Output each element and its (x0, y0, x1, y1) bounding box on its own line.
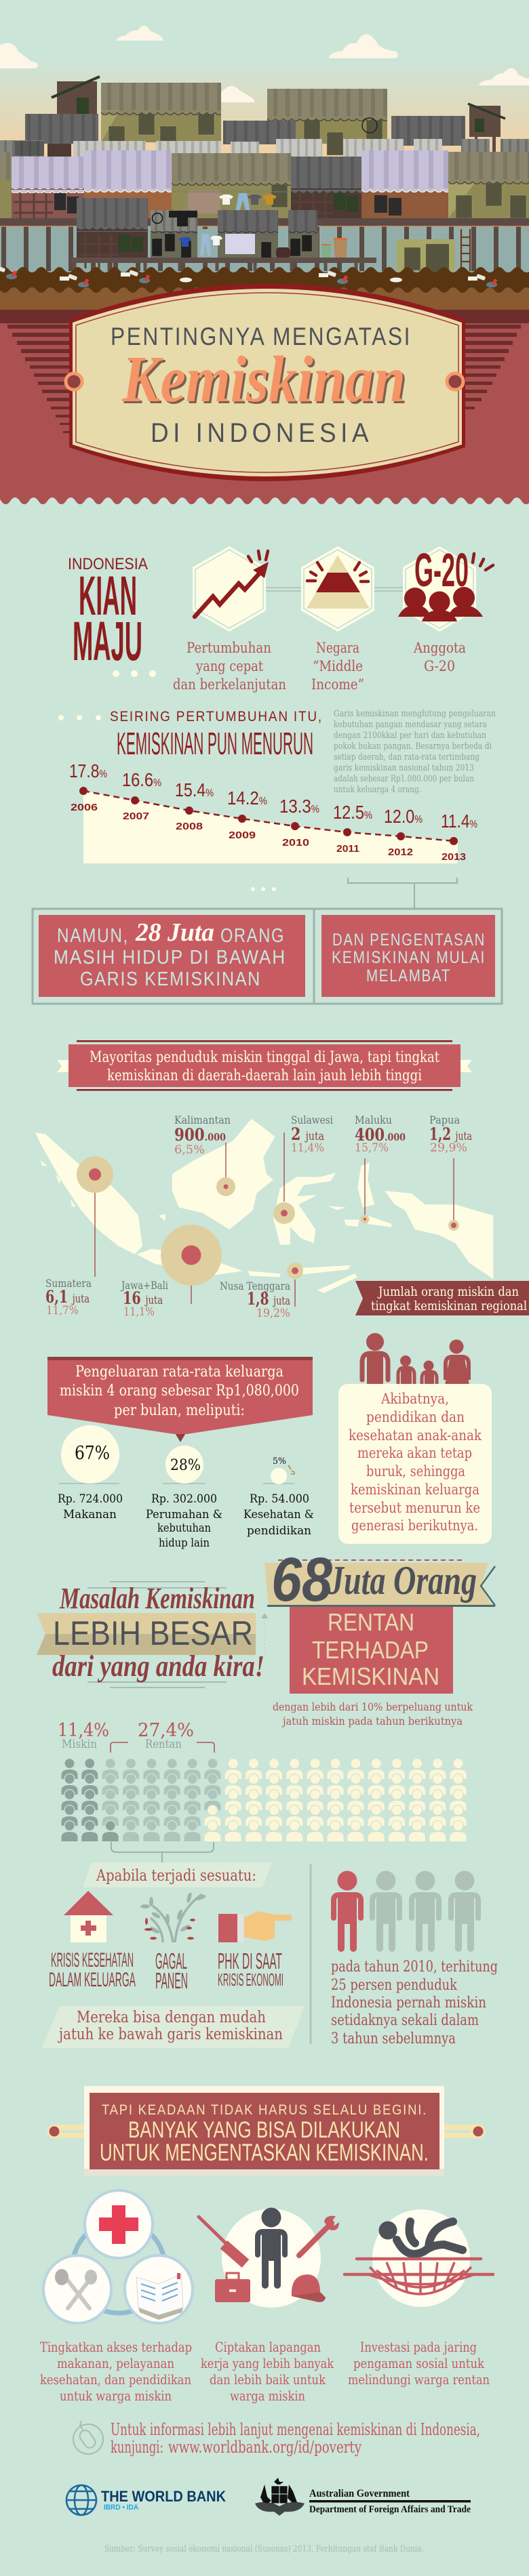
chart years (71, 802, 466, 863)
chart values: 15.4% (175, 779, 214, 800)
ribbon: mudah jatuh miskin: jatuh ke bawah garis kemiskinan (57, 2026, 283, 2043)
ribbon: apabila terjadi sesuatu: Apabila terjadi sesuatu: (96, 1867, 256, 1885)
map labels: Kalimantan (174, 1113, 231, 1126)
panel: much can be done (48, 2086, 484, 2176)
chart values: 12.5% (333, 802, 372, 823)
expenditure labels: Kesehatan & (243, 1508, 314, 1521)
expenditure circles: 28% (170, 1457, 201, 1474)
divider (309, 1864, 312, 2044)
chart years: 2010 (282, 837, 309, 849)
callout: consequences for children: kemiskinan keluarga (351, 1481, 479, 1498)
hexagon captions: Anggota (413, 640, 466, 656)
map labels: 6,1 juta (45, 1287, 90, 1307)
connector from chart to boxes (348, 878, 457, 909)
icon: family (362, 1333, 469, 1385)
people pictogram: 100 persons (61, 1758, 467, 1862)
ribbon: mudah jatuh miskin (41, 2006, 305, 2048)
heading: poverty decline (58, 709, 323, 761)
expenditure circles: 67% (75, 1443, 110, 1464)
map labels: Sumatera (45, 1277, 92, 1290)
expenditure labels (58, 1492, 314, 1550)
map labels: 400.000 (355, 1125, 406, 1145)
poverty line definition: untuk keluarga 4 orang. (334, 785, 421, 795)
icon: health house (64, 1891, 113, 1942)
expenditure banner: miskin 4 orang sebesar Rp1,080,000 (60, 1383, 299, 1399)
hexagon captions: Negara (316, 640, 359, 656)
crisis labels: DALAM KELUARGA (49, 1969, 136, 1991)
logo: Australian Government: Australian Government (309, 2488, 410, 2499)
ribbon: apabila terjadi sesuatu (83, 1862, 272, 1887)
callout text: 28 juta: MASIH HIDUP DI BAWAH (54, 947, 286, 968)
map labels: Maluku (355, 1113, 392, 1126)
map labels: 900.000 (174, 1125, 226, 1145)
hexagon captions (173, 640, 466, 693)
text: KRISIS EKONOMI (218, 1969, 283, 1990)
chart values: 11.4% (441, 811, 477, 832)
poverty line definition: dengan 2100kkal per hari dan kebutuhan (334, 731, 487, 741)
text: 25 percent: 3 tahun sebelumnya (331, 2030, 456, 2047)
chart values: 14.2% (227, 788, 267, 809)
callout text: 28 juta: 28 Juta (135, 918, 214, 947)
hexagon captions: Pertumbuhan (187, 640, 271, 656)
panel: 28 juta / slowing reduction (33, 909, 502, 1004)
recommendation 2: warga miskin (230, 2388, 305, 2404)
recommendation 1: Tingkatkan akses terhadap (40, 2339, 192, 2355)
vulnerable caption: dengan lebih dari 10% berpeluang untuk (273, 1700, 473, 1713)
map of Indonesia (35, 1119, 493, 1293)
callout text: slowing: MELAMBAT (366, 966, 451, 985)
expenditure circles: 5% (273, 1456, 286, 1467)
connectors between hexagons (263, 588, 408, 591)
poverty line definition: kebutuhan pangan mendasar yang setara (334, 720, 487, 730)
expenditure banner: Pengeluaran rata-rata keluarga (75, 1364, 283, 1381)
heading: masalah lebih besar: Masalah Kemiskinan (59, 1582, 255, 1615)
recommendation 3: Investasi pada jaring (360, 2339, 477, 2355)
callout: consequences for children: buruk, sehingga (366, 1463, 465, 1479)
callout text: 28 juta (54, 918, 286, 990)
chart years: 2006 (71, 802, 98, 813)
people chart stats: 11,4% (58, 1720, 109, 1741)
recommendation 3 (348, 2339, 490, 2388)
callout text: slowing (332, 931, 486, 985)
icon: pointing hand layoff (218, 1911, 292, 1942)
heading: poverty decline: SEIRING PERTUMBUHAN ITU, (110, 709, 323, 724)
callout text: slowing: KEMISKINAN MULAI (332, 948, 486, 967)
heading: masalah lebih besar: LEBIH BESAR (53, 1614, 253, 1652)
chart years: 2013 (442, 851, 466, 863)
map labels: 6,5% (174, 1143, 205, 1157)
map labels: 2 juta (291, 1124, 324, 1144)
hexagon captions: Income” (311, 676, 364, 693)
expenditure circles (59, 1425, 295, 1484)
logo: World Bank (66, 2485, 226, 2515)
logo: Australian Government: Department of Foreign Affairs and Trade (309, 2504, 471, 2515)
text: 25 percent: setidaknya sekali dalam (331, 2012, 479, 2029)
heading: masalah lebih besar (37, 1582, 268, 1688)
map bubbles and leaders (77, 1132, 459, 1307)
text: 25 percent: 25 persen penduduk (331, 1977, 458, 1994)
banner: regional poverty: kemiskinan di daerah-daerah lain jauh lebih tinggi (107, 1067, 422, 1084)
banner: regional poverty: Mayoritas penduduk miskin tinggal di Jawa, tapi tingkat (90, 1049, 439, 1066)
more information (111, 2420, 480, 2457)
clouds (0, 26, 529, 102)
panel: rentan terhadap kemiskinan: KEMISKINAN (302, 1662, 439, 1690)
back row houses (25, 77, 505, 156)
recommendation 2: dan lebih baik untuk (210, 2371, 326, 2388)
people chart stats: 27,4% (138, 1720, 194, 1741)
ribbon: mudah jatuh miskin: Mereka bisa dengan mudah (77, 2009, 266, 2026)
icon: G-20 hexagon (398, 544, 493, 632)
map labels: 16 juta (123, 1288, 163, 1308)
map labels: 19,2% (256, 1307, 290, 1320)
expenditure banner: per bulan, meliputi: (114, 1402, 245, 1419)
scroll rollers (48, 2125, 484, 2138)
poverty line definition: adalah sebesar Rp1.080.000 per bulan (334, 774, 475, 784)
poverty line definition: pokok bukan pangan. Besarnya berbeda di (334, 741, 492, 752)
icon: safety net (345, 2209, 493, 2307)
logo: World Bank: IBRD • IDA (104, 2503, 138, 2512)
icon: failed crops (140, 1892, 207, 1942)
title text (111, 323, 412, 448)
map labels: 11,7% (46, 1304, 79, 1317)
text: 25 percent: Indonesia pernah miskin (331, 1995, 486, 2011)
callout text: 28 juta: GARIS KEMISKINAN (80, 968, 261, 990)
callout: consequences for children (338, 1384, 492, 1544)
callout text: 28 juta: NAMUN, (57, 925, 129, 947)
expenditure labels: pendidikan (247, 1524, 311, 1538)
map legend tag (355, 1281, 529, 1315)
panel: rentan terhadap kemiskinan: TERHADAP (312, 1636, 429, 1664)
icon: computer mouse (73, 2421, 103, 2454)
map labels: Jawa+Bali (120, 1279, 168, 1292)
chart values: 16.6% (122, 769, 161, 790)
title text: PENTINGNYA MENGATASI (111, 323, 412, 350)
poverty line definition: Garis kemiskinan menghitung pengeluaran (334, 709, 496, 719)
callout: consequences for children: Akibatnya, (380, 1391, 449, 1407)
recommendation 1: kesehatan, dan pendidikan (40, 2371, 191, 2388)
map labels (45, 1113, 472, 1320)
expenditure labels: Rp. 54.000 (250, 1492, 309, 1506)
panel: much can be done: BANYAK YANG BISA DILAKUKAN (128, 2117, 400, 2143)
heading: Indonesia kian maju: KIAN (79, 565, 137, 627)
expenditure labels: Makanan (63, 1508, 117, 1521)
recommendation 2: Ciptakan lapangan (215, 2339, 321, 2355)
recommendation 1 (40, 2339, 192, 2404)
hexagon captions: yang cepat (195, 658, 263, 674)
map labels: Sulawesi (291, 1113, 333, 1126)
expenditure labels: Rp. 724.000 (58, 1492, 123, 1506)
chart years: 2007 (123, 811, 149, 822)
title text: Kemiskinan (123, 345, 408, 418)
icon: pyramid hexagon (301, 546, 374, 632)
expenditure labels: hidup lain (159, 1536, 210, 1550)
front row huts on platform (71, 198, 376, 271)
recommendation 1: untuk warga miskin (60, 2388, 172, 2404)
heading: Indonesia kian maju: INDONESIA (68, 555, 148, 573)
recommendation 1: makanan, pelayanan (57, 2355, 174, 2371)
hexagon captions: dan berkelanjutan (173, 676, 286, 693)
logo: Australian Government (255, 2478, 471, 2516)
heading: 68 juta orang ribbon: 68 (271, 1545, 333, 1614)
chart values (69, 760, 477, 832)
callout: consequences for children: kesehatan anak-anak (349, 1427, 482, 1444)
title panel background (0, 310, 529, 504)
line chart: poverty rate 2006-2013 (69, 760, 477, 863)
callout: consequences for children: generasi berikutnya. (351, 1517, 478, 1534)
map labels: 1,2 juta (429, 1124, 472, 1144)
mud bank with rubbish (0, 266, 529, 310)
small dots (251, 887, 276, 891)
expenditure banner (47, 1357, 313, 1442)
recommendations text (40, 2339, 490, 2404)
chart years: 2012 (388, 846, 413, 858)
crisis labels: PANEN (155, 1968, 188, 1993)
chart values: 12.0% (384, 806, 423, 827)
panel: much can be done: TAPI KEADAAN TIDAK HARUS SELALU BEGINI. (102, 2102, 427, 2118)
expenditure labels: Perumahan & (146, 1508, 222, 1521)
middle row houses (0, 150, 529, 226)
text: 25 percent (331, 1959, 498, 2047)
chart years: 2011 (336, 843, 359, 855)
map labels: Papua (429, 1113, 460, 1126)
title text: Kemiskinan (121, 343, 406, 416)
heading: 68 juta orang ribbon: Juta Orang (328, 1558, 477, 1603)
expenditure labels: kebutuhan (157, 1521, 211, 1535)
banner: regional poverty (57, 1040, 472, 1091)
callout: consequences for children: tersebut menurun ke (349, 1500, 480, 1516)
recommendation 2: kerja yang lebih banyak (201, 2355, 334, 2371)
heading: Indonesia kian maju: MAJU (73, 611, 142, 672)
expenditure labels: Rp. 302.000 (151, 1492, 217, 1506)
heading: Indonesia kian maju (68, 555, 156, 677)
vulnerable caption: jatuh miskin pada tahun berikutnya (281, 1715, 463, 1727)
callout: consequences for children: pendidikan dan (366, 1409, 465, 1425)
deck, water and posts (0, 218, 529, 272)
source note: Sumber: Survey sosial ekonomi nasional (Susenas) 2013. Perhitungan staf Bank Dunia. (104, 2544, 424, 2554)
laundry line (173, 192, 288, 212)
map labels: 11,4% (291, 1141, 324, 1155)
map labels: 15,7% (355, 1141, 389, 1155)
poverty line definition: setiap daerah, dan rata-rata tertimbang (334, 752, 479, 762)
chart values: 13.3% (279, 796, 319, 817)
people chart stats: Rentan (145, 1738, 182, 1751)
logo: World Bank: THE WORLD BANK (101, 2488, 226, 2505)
heading: masalah lebih besar: dari yang anda kira! (52, 1650, 264, 1683)
map labels: 11,1% (123, 1305, 155, 1319)
crisis labels: GAGAL (155, 1948, 187, 1974)
map labels: 1,8 juta (247, 1289, 290, 1309)
recommendation 3: pengaman sosial untuk (353, 2355, 485, 2371)
recommendation 3: melindungi warga rentan (348, 2371, 490, 2388)
icon: food, health, education circles (43, 2190, 193, 2323)
hexagon captions: “Middle (313, 658, 363, 674)
badge rivets (66, 373, 463, 390)
callout: consequences for children: mereka akan tetap (357, 1445, 472, 1461)
poverty line definition: garis kemiskinan nasional tahun 2013 (334, 763, 474, 773)
title badge (66, 283, 465, 481)
callout text: 28 juta: ORANG (220, 925, 285, 947)
vulnerable caption (273, 1700, 473, 1727)
title text: DI INDONESIA (151, 418, 373, 448)
icon: worker with tools (199, 2208, 339, 2308)
crisis labels (49, 1948, 283, 1993)
callout text: slowing: DAN PENGENTASAN (332, 931, 486, 949)
map labels: 29,9% (430, 1141, 467, 1155)
icon: growth arrow hexagon (193, 546, 269, 632)
recommendation 2 (201, 2339, 334, 2404)
heading: 68 juta orang ribbon (264, 1545, 495, 1614)
icon: G-20 hexagon: G-20 (414, 544, 469, 596)
more information: www.worldbank.org/id/poverty (168, 2438, 361, 2457)
chart years: 2009 (229, 830, 256, 841)
people chart stats (58, 1720, 214, 1753)
people chart stats: Miskin (62, 1738, 97, 1751)
more information: kunjungi: (111, 2438, 163, 2457)
hexagon captions: G-20 (424, 658, 455, 674)
chart values: 17.8% (69, 760, 107, 781)
header illustration: slum village over water (0, 0, 529, 310)
text: PHK DI SAAT (218, 1948, 282, 1974)
poverty line definition (334, 709, 496, 795)
map labels: Nusa Tenggara (220, 1280, 290, 1292)
crisis labels: KRISIS KESEHATAN (51, 1949, 134, 1971)
icon: four persons, one in four (334, 1870, 478, 1948)
light tin row (0, 139, 529, 158)
chart years: 2008 (176, 821, 203, 832)
panel: rentan terhadap kemiskinan (290, 1607, 453, 1694)
panel: rentan terhadap kemiskinan: RENTAN (328, 1608, 414, 1636)
